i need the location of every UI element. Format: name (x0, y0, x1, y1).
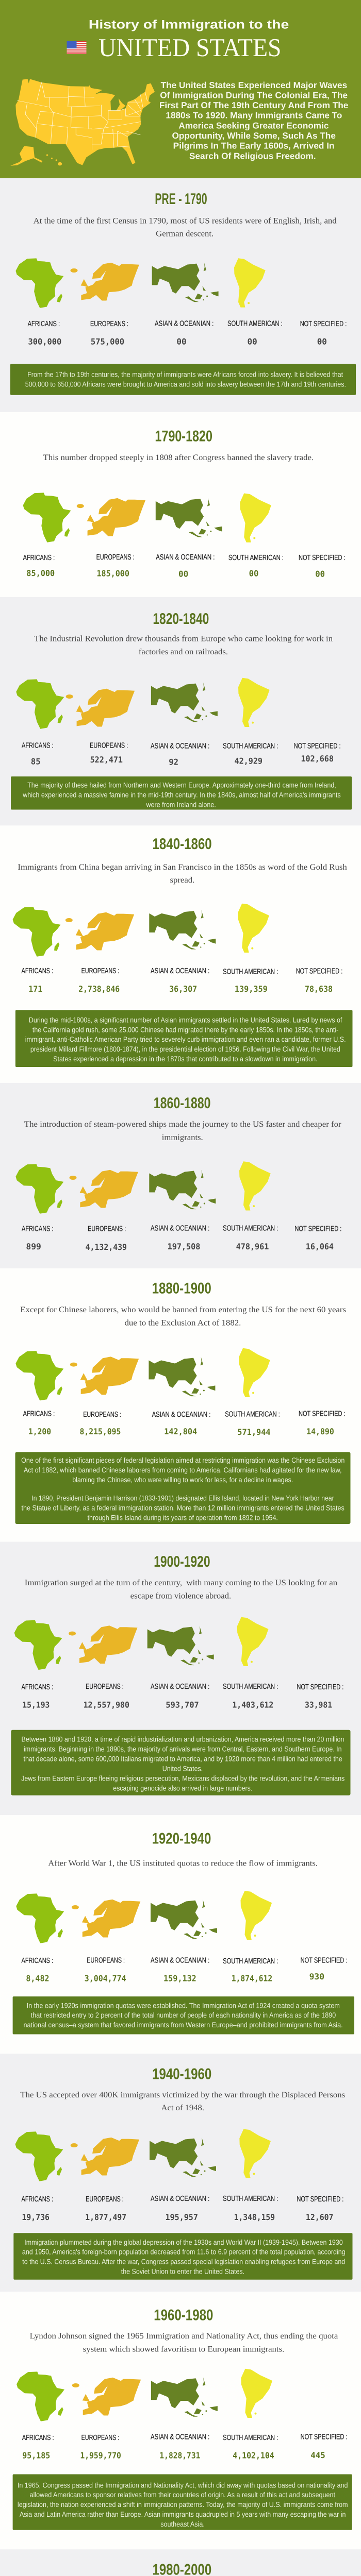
statistics row: AFRICANS : (22, 1225, 54, 1233)
statistics row: EUROPEANS : (86, 2195, 124, 2204)
intro text: due to the Exclusion Act of 1882. (125, 1318, 241, 1327)
statistics row: NOT SPECIFIED : (300, 320, 347, 328)
panel: 1820-1840 (0, 597, 361, 825)
statistics row: NOT SPECIFIED : (301, 2433, 348, 2441)
statistics row: AFRICANS : (23, 554, 55, 562)
text block: header introduction: First Part Of The 19th Century And From The (159, 100, 348, 110)
intro text (34, 634, 333, 656)
heading: 1920-1940 (152, 1830, 211, 1848)
statistics row: 1,828,731 (159, 2451, 200, 2461)
statistics row: SOUTH AMERICAN : (223, 1957, 278, 1965)
callout: escaping genocide also arrived in large numbers. (113, 1784, 252, 1792)
text block: header introduction: Search Of Religious Freedom. (189, 151, 316, 161)
icons: continents (16, 678, 270, 729)
icons: continents (15, 1161, 271, 1214)
intro text: After World War 1, the US instituted quotas to reduce the flow of immigrants. (48, 1859, 318, 1868)
callout (13, 2474, 352, 2530)
icons: continents (15, 1348, 270, 1400)
statistics row: 142,804 (164, 1427, 197, 1436)
callout (13, 1996, 354, 2034)
intro text: Lyndon Johnson signed the 1965 Immigration and Nationality Act, thus ending the quota (30, 2332, 338, 2341)
intro text (18, 863, 347, 885)
statistics row: NOT SPECIFIED : (299, 554, 346, 562)
icons: continents (15, 2129, 271, 2181)
intro text: Except for Chinese laborers, who would be banned from entering the US for the next 60 years (20, 1306, 346, 1314)
statistics row: 1,959,770 (80, 2451, 121, 2461)
statistics row: EUROPEANS : (81, 2434, 119, 2442)
statistics row: NOT SPECIFIED : (296, 968, 342, 976)
statistics row: 1,874,612 (232, 1974, 272, 1984)
statistics row: ASIAN & OCEANIAN : (152, 1411, 210, 1419)
statistics row: 4,102,104 (233, 2451, 274, 2461)
statistics row (22, 2433, 348, 2461)
statistics row: EUROPEANS : (88, 1225, 126, 1233)
statistics row: AFRICANS : (22, 1957, 53, 1965)
statistics row: 8,482 (26, 1974, 50, 1984)
statistics row: 102,668 (301, 754, 334, 764)
callout (15, 1010, 352, 1067)
title line one: History of Immigration to the (89, 18, 289, 32)
text block: header introduction: Pilgrims In The Early 1600s, Arrived In (173, 141, 335, 151)
callout (13, 2233, 353, 2280)
intro text: The Industrial Revolution drew thousands from Europe who came looking for work in (34, 634, 333, 643)
statistics row: EUROPEANS : (90, 742, 128, 750)
heading: 1940-1960 (152, 2065, 211, 2082)
statistics row: 4,132,439 (86, 1242, 127, 1252)
panel: pre-1790 (0, 178, 361, 412)
statistics row: 575,000 (91, 337, 124, 346)
statistics row: 1,403,612 (232, 1700, 273, 1710)
statistics row: 15,193 (22, 1700, 50, 1710)
statistics row: 3,004,774 (85, 1974, 126, 1984)
statistics row (22, 967, 342, 994)
heading: 1840-1860 (153, 836, 212, 853)
panel: 1960-1980 (0, 2292, 361, 2549)
statistics row: 36,307 (169, 984, 197, 994)
heading: 1880-1900 (152, 1280, 211, 1297)
statistics row: SOUTH AMERICAN : (228, 554, 284, 562)
statistics row: AFRICANS : (22, 967, 53, 975)
statistics row: ASIAN & OCEANIAN : (151, 1225, 209, 1233)
panel: 1900-1920 (0, 1541, 361, 1815)
panel: 1840-1860 (0, 825, 361, 1083)
callout: allowed Americans to sponsor relatives from their countries of origin. As a result of this act and subsequent (30, 2490, 335, 2499)
statistics row: SOUTH AMERICAN : (227, 319, 283, 328)
statistics row: 522,471 (90, 755, 123, 765)
statistics row: 1,348,159 (234, 2212, 275, 2222)
intro text: The introduction of steam-powered ships made the journey to the US faster and cheaper for (24, 1120, 341, 1129)
intro text: The US accepted over 400K immigrants victimized by the war through the Displaced Persons (20, 2091, 345, 2099)
statistics row (22, 1957, 348, 1984)
statistics row: ASIAN & OCEANIAN : (151, 1683, 209, 1691)
callout: were from Ireland alone. (146, 800, 216, 808)
statistics row: 00 (315, 569, 325, 579)
callout (11, 1730, 350, 1795)
intro text (24, 1120, 341, 1142)
statistics row: AFRICANS : (23, 1410, 55, 1418)
statistics row: NOT SPECIFIED : (299, 1410, 346, 1418)
statistics row: 930 (309, 1972, 324, 1981)
icons: continents (13, 904, 269, 957)
intro text (20, 2091, 345, 2112)
callout: that restricted entry to 2 percent of the total number of people of each nationality in America as of the 1890 (31, 2011, 336, 2019)
statistics row: AFRICANS : (22, 2195, 53, 2204)
intro text: Immigrants from China began arriving in San Francisco in the 1850s as word of the Gold Rush (18, 863, 347, 872)
statistics row: 571,944 (237, 1427, 271, 1437)
statistics row: 159,132 (163, 1974, 196, 1984)
statistics row: SOUTH AMERICAN : (223, 968, 278, 976)
callout (10, 364, 356, 395)
statistics row: 00 (248, 337, 257, 346)
statistics row: 445 (310, 2450, 325, 2460)
statistics row: ASIAN & OCEANIAN : (156, 553, 215, 562)
panel: 1940-1960 (0, 2054, 361, 2292)
map: United States (10, 79, 155, 166)
statistics row: SOUTH AMERICAN : (223, 1225, 278, 1233)
statistics row: 1,200 (28, 1427, 51, 1436)
text block: header introduction: 1880s To 1920. Many Immigrants Came To (166, 111, 342, 121)
statistics row: 195,957 (165, 2212, 198, 2222)
text block: header introduction: The United States Experienced Major Waves (161, 80, 347, 90)
statistics row: AFRICANS : (22, 742, 54, 750)
text block: header introduction: Opportunity, While Some, Such As The (172, 131, 336, 141)
callout: southeast Asia. (160, 2520, 205, 2528)
statistics row (22, 1683, 343, 1710)
panel: 1860-1880 (0, 1083, 361, 1268)
statistics row: ASIAN & OCEANIAN : (155, 319, 214, 328)
statistics row: 12,607 (306, 2212, 333, 2222)
intro text: spread. (170, 876, 194, 885)
statistics row: ASIAN & OCEANIAN : (151, 2433, 209, 2441)
statistics row: SOUTH AMERICAN : (225, 1410, 280, 1418)
panel: 1980-2000 (0, 2549, 361, 2576)
intro text: factories and on railroads. (139, 648, 228, 656)
heading: 1900-1920 (154, 1553, 210, 1570)
heading: PRE - 1790 (155, 191, 207, 208)
statistics row: SOUTH AMERICAN : (223, 1683, 278, 1691)
statistics row: ASIAN & OCEANIAN : (151, 742, 209, 750)
icons: continents (16, 1891, 272, 1943)
statistics row (28, 319, 347, 346)
statistics row: 33,981 (305, 1700, 332, 1710)
callout: States experienced a depression in the 1870s that contributed to a slowdown in immigration. (53, 1055, 318, 1063)
panel: 1880-1900 (0, 1268, 361, 1541)
callout: the Soviet Union to enter the United States. (121, 2267, 244, 2275)
statistics row: NOT SPECIFIED : (297, 1683, 343, 1691)
statistics row: 85 (31, 756, 41, 767)
callout (11, 776, 352, 810)
text block: header introduction (159, 80, 348, 161)
statistics row (23, 553, 346, 579)
statistics row: 593,707 (166, 1700, 199, 1710)
icon: American flag (67, 41, 87, 54)
statistics row: EUROPEANS : (81, 967, 119, 975)
callout (15, 1452, 351, 1524)
statistics row (23, 1410, 346, 1437)
statistics row: ASIAN & OCEANIAN : (151, 2195, 209, 2203)
statistics row: 16,064 (306, 1242, 334, 1251)
statistics row: 1,877,497 (85, 2212, 126, 2222)
statistics row: EUROPEANS : (96, 553, 135, 562)
intro text: At the time of the first Census in 1790, most of US residents were of English, Irish, and (34, 216, 337, 225)
statistics row: NOT SPECIFIED : (294, 1225, 341, 1233)
callout: blaming the Chinese, who were willing to work for less, for a decline in wages. (72, 1476, 293, 1484)
heading: 1960-1980 (154, 2307, 213, 2324)
statistics row: 00 (249, 569, 258, 578)
statistics row: AFRICANS : (28, 320, 60, 328)
statistics row: 00 (176, 337, 187, 346)
heading: 1820-1840 (153, 611, 209, 628)
text block: header introduction: America Seeking Greater Economic (178, 121, 329, 130)
statistics row: NOT SPECIFIED : (294, 742, 341, 750)
intro text: escape from violence abroad. (130, 1591, 231, 1600)
statistics row: NOT SPECIFIED : (301, 1957, 348, 1965)
intro text: This number dropped steeply in 1808 after Congress banned the slavery trade. (43, 453, 314, 462)
intro text: Act of 1948. (161, 2104, 204, 2112)
statistics row: ASIAN & OCEANIAN : (151, 1957, 209, 1965)
statistics row: 95,185 (22, 2451, 50, 2461)
statistics row: 00 (178, 569, 188, 579)
icons: continents (15, 258, 266, 308)
statistics row: 85,000 (26, 568, 55, 578)
statistics row: 139,359 (235, 984, 268, 994)
intro text: Immigration surged at the turn of the century, with many coming to the US looking for an (25, 1579, 337, 1587)
statistics row: 92 (169, 757, 178, 767)
icons: continents (17, 2369, 272, 2421)
icons: continents (14, 1617, 268, 1670)
statistics row: EUROPEANS : (87, 1957, 125, 1965)
statistics row: 8,215,095 (79, 1427, 121, 1436)
statistics row: 2,738,846 (78, 984, 120, 994)
panel: 1790-1820 (0, 412, 361, 597)
intro text (25, 1579, 337, 1600)
statistics row: 19,736 (22, 2212, 50, 2222)
statistics row: 478,961 (236, 1242, 269, 1251)
statistics row: 171 (28, 984, 42, 994)
statistics row (22, 1225, 341, 1252)
intro text (34, 216, 337, 239)
statistics row (22, 742, 341, 767)
icons: continents (23, 493, 271, 543)
statistics row: SOUTH AMERICAN : (223, 2195, 278, 2203)
statistics row: AFRICANS : (22, 1683, 53, 1691)
intro text (20, 1306, 346, 1327)
statistics row: EUROPEANS : (86, 1683, 124, 1691)
intro text (30, 2332, 338, 2353)
statistics row: 42,929 (234, 756, 262, 766)
statistics row: SOUTH AMERICAN : (223, 742, 278, 750)
statistics row: 12,557,980 (84, 1700, 129, 1710)
statistics row: 899 (26, 1242, 41, 1251)
heading: 1860-1880 (154, 1095, 210, 1112)
callout: through Ellis Island during its years of operation from 1892 to 1954. (88, 1513, 278, 1521)
statistics row: 197,508 (168, 1242, 200, 1251)
text block: header introduction: Of Immigration During The Colonial Era, The (160, 91, 348, 100)
statistics row: 78,638 (305, 984, 333, 994)
callout: United States. (162, 1764, 203, 1772)
statistics row: 300,000 (28, 337, 61, 346)
statistics row: SOUTH AMERICAN : (223, 2434, 278, 2442)
panel: header (0, 0, 361, 178)
intro text: German descent. (156, 230, 214, 239)
statistics row (22, 2195, 343, 2222)
statistics row: EUROPEANS : (90, 320, 128, 328)
statistics row: 185,000 (97, 569, 129, 578)
statistics row: NOT SPECIFIED : (297, 2195, 343, 2204)
statistics row: ASIAN & OCEANIAN : (151, 967, 209, 975)
heading: 1790-1820 (155, 428, 212, 445)
title line two: UNITED STATES (99, 33, 282, 62)
statistics row: AFRICANS : (22, 2434, 54, 2442)
intro text: system which showed favoritism to European immigrants. (83, 2345, 284, 2353)
panel: 1920-1940 (0, 1815, 361, 2054)
intro text: immigrants. (162, 1133, 203, 1142)
statistics row: 14,890 (306, 1427, 334, 1436)
statistics row: 00 (317, 337, 327, 346)
statistics row: EUROPEANS : (83, 1411, 121, 1419)
